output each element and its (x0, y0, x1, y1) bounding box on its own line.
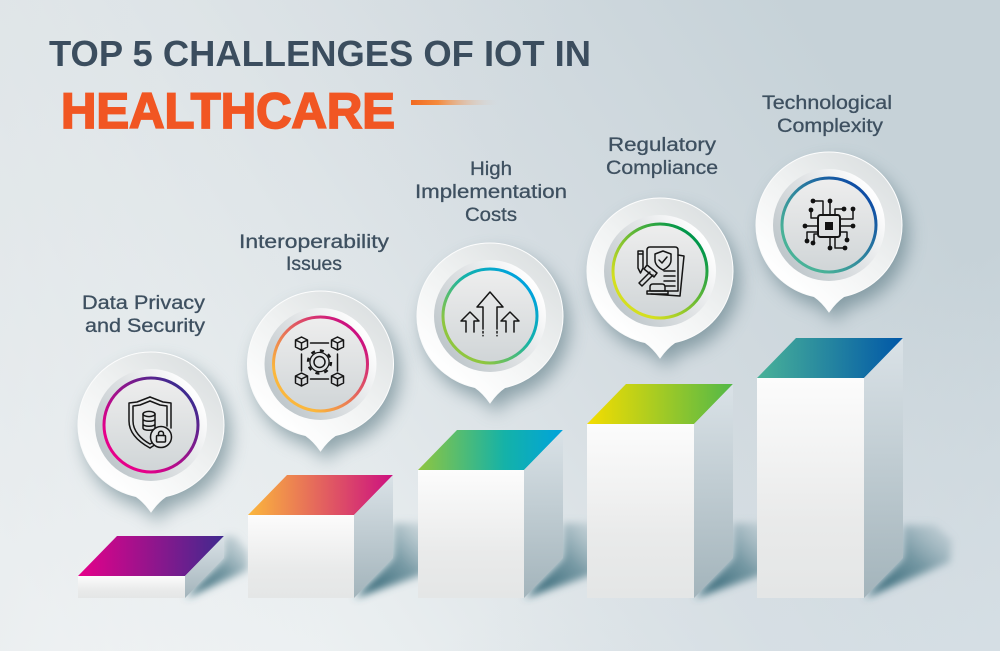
front face (757, 378, 864, 598)
side face (864, 338, 903, 598)
side face (524, 430, 563, 598)
label: interoperability issues: Interoperability (239, 231, 389, 253)
top face (418, 430, 563, 470)
icon: microchip circuit (803, 199, 855, 250)
top face (757, 338, 903, 378)
icon: three rising arrows (461, 292, 519, 336)
pin 1: data privacy (78, 352, 230, 522)
pin 2: interoperability (248, 291, 400, 461)
label: regulatory compliance (606, 134, 718, 179)
bar 5: technological complexity (757, 338, 903, 598)
bar shadows (186, 523, 952, 598)
icon: documents, shield, gavel and pencil (638, 247, 684, 296)
label: high implementation costs: Implementation (415, 181, 567, 203)
label: high implementation costs (415, 158, 567, 226)
label: interoperability issues (239, 231, 389, 275)
label: regulatory compliance: Compliance (606, 157, 718, 179)
label: high implementation costs: High (470, 158, 512, 180)
bar 1: data privacy (78, 536, 224, 598)
label: high implementation costs: Costs (465, 204, 517, 226)
pin 3: implementation costs (417, 243, 569, 413)
title line: healthcare: HEALTHCARE (61, 83, 395, 139)
label: interoperability issues: Issues (286, 253, 342, 275)
icon: gear with connected cubes (296, 337, 344, 386)
pin 5: technological complexity (756, 152, 908, 322)
bar 2: interoperability (248, 475, 393, 598)
label: technological complexity: Complexity (777, 115, 883, 137)
icon: shield with database and lock (129, 397, 172, 448)
accent dash (411, 100, 501, 105)
front face (418, 470, 524, 598)
label: technological complexity (762, 92, 892, 137)
label: technological complexity: Technological (762, 92, 892, 114)
bar 3: implementation costs (418, 430, 563, 598)
side face (354, 475, 393, 598)
top face (248, 475, 393, 515)
front face (587, 424, 694, 598)
label: data privacy and security: and Security (85, 315, 205, 337)
title (49, 33, 591, 139)
label: regulatory compliance: Regulatory (608, 134, 716, 156)
pin 4: regulatory compliance (587, 198, 739, 368)
front face (248, 515, 354, 598)
title line: top 5 challenges: TOP 5 CHALLENGES OF IOT IN (49, 33, 591, 74)
label: data privacy and security: Data Privacy (82, 292, 205, 314)
top face (78, 536, 224, 576)
front face (78, 576, 185, 598)
top face (587, 384, 733, 424)
side face (185, 536, 224, 598)
side face (694, 384, 733, 598)
bar 4: regulatory compliance (587, 384, 733, 598)
label: data privacy and security (82, 292, 205, 337)
